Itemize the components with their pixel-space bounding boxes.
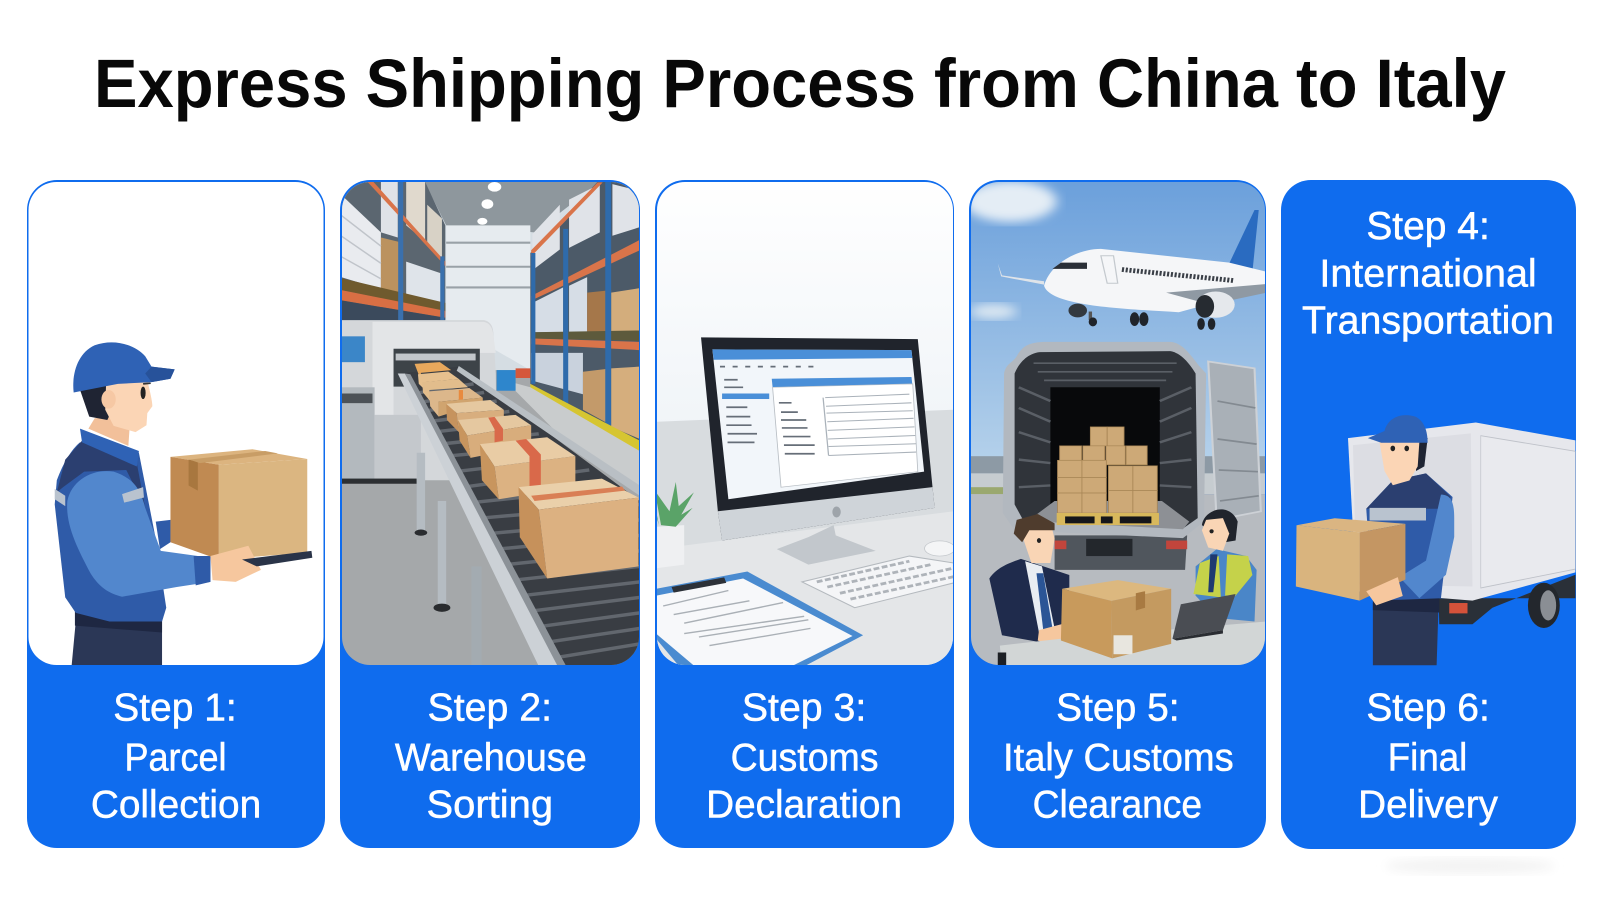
illustration: courier holding a parcel	[55, 342, 312, 666]
sorting machine	[341, 320, 530, 484]
caption: step 5: Clearance	[1033, 783, 1202, 826]
caption: step 4	[1302, 205, 1554, 343]
caption: step 3: Step 3:	[742, 686, 866, 729]
caption: step 2: Step 2:	[428, 686, 552, 729]
caption: step 4: Transportation	[1302, 300, 1554, 343]
parcels on conveyor	[415, 362, 639, 578]
caption: step 1	[91, 686, 261, 826]
panel: step 5 italy customs clearance	[964, 177, 1269, 848]
panel: step 3 customs declaration	[653, 177, 958, 848]
smudge near bottom right	[1385, 858, 1555, 874]
caption: step 5: Italy Customs	[1003, 736, 1234, 779]
plant	[657, 482, 694, 568]
caption: step 2: Warehouse	[395, 736, 587, 779]
caption: step 2: Sorting	[427, 783, 553, 826]
caption: step 3: Customs	[731, 736, 879, 779]
title: Express Shipping Process from China to Italy	[94, 45, 1506, 122]
caption: step 1: Collection	[91, 783, 261, 826]
cargo van	[1003, 342, 1261, 570]
right rack	[530, 177, 640, 451]
caption: step 5	[1003, 686, 1234, 826]
panel: step 1 parcel collection	[27, 180, 325, 848]
left rack	[337, 177, 445, 322]
parcel	[1296, 518, 1405, 601]
caption: step 4: Step 4:	[1366, 205, 1490, 248]
caption: step 6: Final	[1388, 736, 1467, 779]
panel: step 2 warehouse sorting	[337, 177, 644, 848]
delivery truck	[1348, 423, 1575, 628]
caption: step 3	[706, 686, 902, 826]
officer in safety vest	[1193, 509, 1257, 621]
caption: step 3: Declaration	[706, 783, 902, 826]
caption: step 6: Delivery	[1358, 783, 1499, 826]
table, laptop and parcel	[998, 580, 1267, 670]
customs officer in suit	[989, 514, 1071, 647]
caption: step 5: Step 5:	[1056, 686, 1180, 729]
conveyor belt	[398, 366, 640, 666]
illustration: courier with delivery truck	[1296, 415, 1575, 665]
caption: step 6	[1358, 686, 1499, 826]
photo: computer on a desk with clipboard	[653, 177, 958, 670]
illustration: plane, cargo van and customs officers	[964, 177, 1269, 670]
stacked cartons	[1058, 427, 1157, 513]
clipboard	[656, 572, 863, 670]
caption: step 2	[395, 686, 587, 826]
caption: step 1: Parcel	[124, 736, 227, 779]
courier	[1296, 415, 1454, 665]
panel: step 4 and step 6	[1281, 180, 1576, 849]
caption: step 4: International	[1319, 253, 1537, 296]
parcel	[170, 449, 307, 560]
keyboard	[802, 556, 954, 608]
caption: step 1: Step 1:	[113, 686, 237, 729]
airplane	[998, 210, 1267, 330]
screen: customs form	[712, 349, 924, 499]
photo: warehouse conveyor with parcels	[337, 177, 644, 670]
caption: step 6: Step 6:	[1366, 686, 1490, 729]
